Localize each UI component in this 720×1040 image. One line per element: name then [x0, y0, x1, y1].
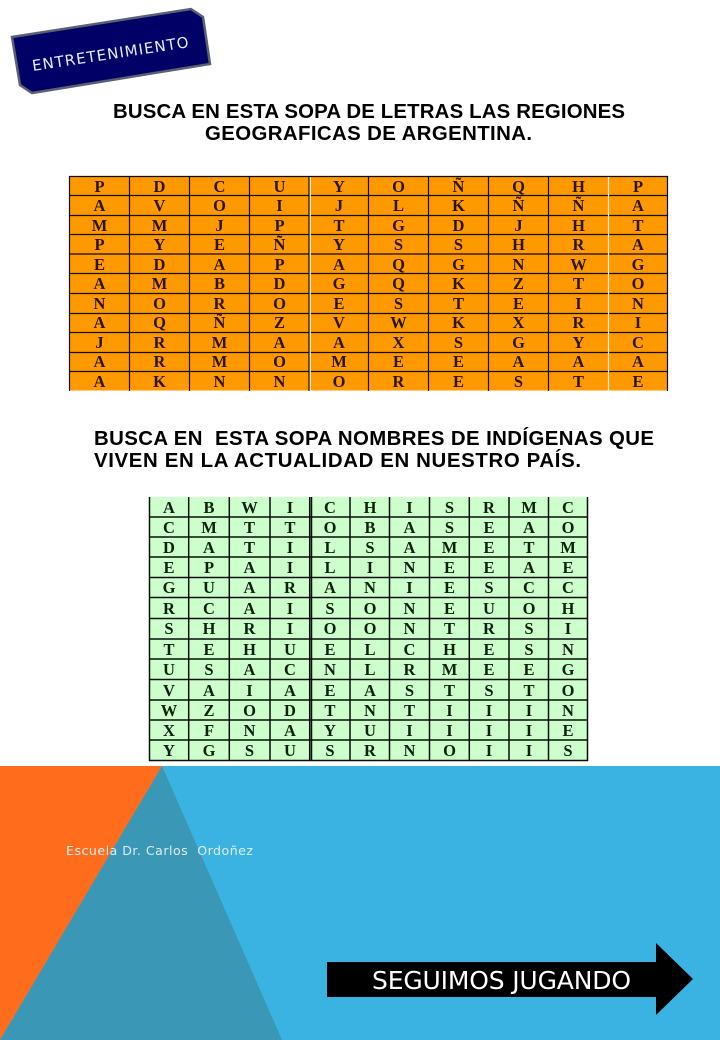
badge: entretenimiento: [12, 9, 210, 93]
heading: nombres indigenas: VIVEN EN LA ACTUALIDAD EN NUESTRO PAÍS.: [94, 449, 581, 472]
word search: pueblos indigenas: VAIAEASTSTO: [163, 681, 575, 700]
word search: regiones: JRMAAXSGYC: [95, 333, 644, 352]
heading: nombres indigenas: BUSCA EN ESTA SOPA NOMBRES DE INDÍGENAS QUE: [94, 427, 654, 450]
word search: pueblos indigenas: ABWICHISRMC: [163, 498, 574, 517]
footer text: school name: Escuela Dr. Carlos Ordoñez: [66, 843, 253, 858]
word search: pueblos indigenas: CMTTOBASEAO: [163, 518, 575, 537]
heading: regiones geograficas: [113, 101, 625, 145]
word search: regiones: EDAPAQGNWG: [94, 255, 645, 274]
word search: pueblos indigenas: USACNLRMEEG: [163, 660, 575, 679]
heading: regiones geograficas: BUSCA EN ESTA SOPA DE LETRAS LAS REGIONES: [113, 101, 625, 123]
word search: pueblos indigenas: GUARANIESCC: [163, 578, 574, 597]
word search: pueblos indigenas: XFNAYUIIIIE: [163, 721, 574, 740]
word search: regiones: ARMOMEEAAA: [94, 352, 644, 371]
heading: regiones geograficas: GEOGRAFICAS DE ARGENTINA.: [205, 123, 532, 145]
word search: regiones: AQÑZVWKXRI: [94, 313, 641, 332]
word search: pueblos indigenas: YGSUSRNOIIS: [163, 741, 573, 760]
word search: pueblos indigenas: EPAILINEEAE: [163, 558, 574, 577]
word search: pueblos indigenas: [149, 497, 588, 761]
word search: regiones: AMBDGQKZTO: [94, 274, 645, 293]
word search: regiones: [69, 176, 668, 391]
arrow: seguimos jugando: SEGUIMOS JUGANDO: [372, 966, 631, 995]
arrow: seguimos jugando: [327, 943, 693, 1015]
badge: entretenimiento: ENTRETENIMIENTO: [31, 33, 190, 75]
footer background: blue panel with triangles: [0, 766, 720, 1040]
word search: regiones: MMJPTGDJHT: [92, 216, 644, 235]
word search: regiones: AKNNORESTE: [94, 372, 644, 391]
word search: regiones: NOROESTEIN: [94, 294, 644, 313]
word search: regiones: AVOIJLKÑÑA: [94, 196, 644, 215]
word search: regiones: PDCUYOÑQHP: [94, 177, 643, 196]
word search: pueblos indigenas: SHRIOONTRSI: [164, 619, 571, 638]
word search: regiones: PYEÑYSSHRA: [94, 235, 644, 254]
word search: pueblos indigenas: WZODTNTIIIN: [161, 701, 574, 720]
word search: pueblos indigenas: RCAISONEUOH: [163, 599, 575, 618]
word search: pueblos indigenas: TEHUELCHESN: [163, 640, 574, 659]
word search: pueblos indigenas: DATILSAMETM: [163, 538, 576, 557]
heading: nombres indigenas: [94, 427, 654, 472]
